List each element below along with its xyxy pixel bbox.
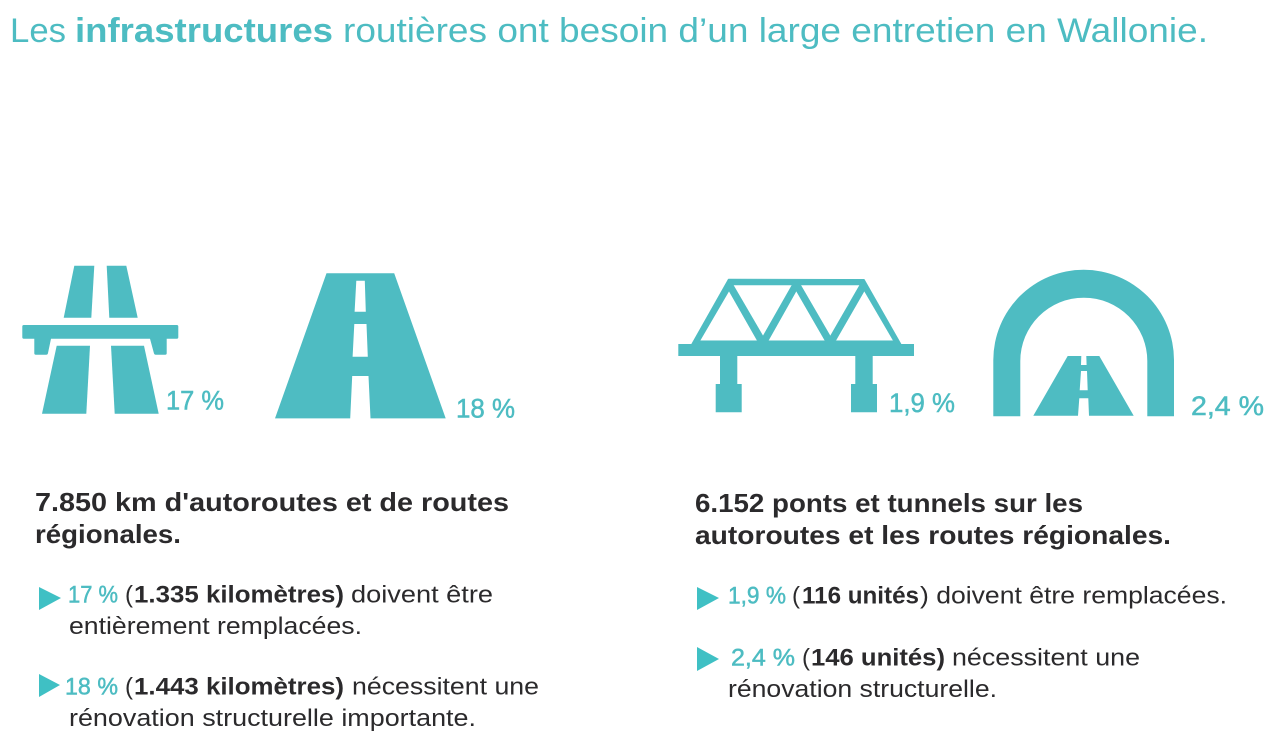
title: routières ont besoin d’un large entretien en Wallonie. [343,12,1208,50]
icon: tunnel [993,270,1174,416]
bullet: 18 % [39,674,539,732]
label: 17 %: 17 % [166,386,224,416]
bullet: 1,9 %: ) doivent être remplacées. [920,582,1227,610]
heading: roads [35,487,509,549]
label: 18 %: 18 % [456,394,515,424]
bullet: 2,4 % [697,644,1140,703]
icon: truss bridge [678,279,914,412]
heading: roads: 7.850 km d'autoroutes et de routes [35,487,509,517]
bullet: 2,4 %: rénovation structurelle. [728,676,997,703]
bullet: 18 %: ( [125,674,133,700]
bullet: 1,9 % [697,582,1227,610]
bullet: 1,9 %: 116 unités [802,582,919,610]
bullet: 2,4 %: nécessitent une [952,644,1140,672]
bullet: 17 %: ( [125,582,133,608]
bullet: 1,9 %: 1,9 % [728,582,786,610]
bullet: 17 % [39,582,493,640]
bullet: 18 %: nécessitent une [352,674,539,700]
bullet: 17 %: 1.335 kilomètres) [134,582,344,608]
heading: bridges and tunnels [695,488,1171,550]
heading: bridges and tunnels: 6.152 ponts et tunnels sur les [695,488,1083,518]
bullet: 1,9 %: ( [792,582,800,610]
label: 2,4 %: 2,4 % [1191,391,1264,421]
label: 1,9 %: 1,9 % [889,388,955,418]
bullet: 17 %: doivent être [351,582,493,608]
title: Les [10,12,66,50]
bullet: 2,4 %: 2,4 % [731,644,795,672]
heading: roads: régionales. [35,519,181,549]
title [10,12,1208,50]
heading: bridges and tunnels: autoroutes et les routes régionales. [695,520,1171,550]
bullet: 2,4 %: ( [802,644,810,672]
bullet: 2,4 %: 146 unités) [811,644,945,672]
icon: road [275,273,446,418]
bullet: 17 %: 17 % [68,582,118,608]
bullet: 18 %: 1.443 kilomètres) [134,674,344,700]
bullet: 18 %: 18 % [65,674,118,700]
bullet: 18 %: rénovation structurelle importante. [69,705,476,732]
bullet: 17 %: entièrement remplacées. [69,613,362,640]
title: infrastructures [75,12,333,50]
icon: motorway bridge [22,266,178,414]
